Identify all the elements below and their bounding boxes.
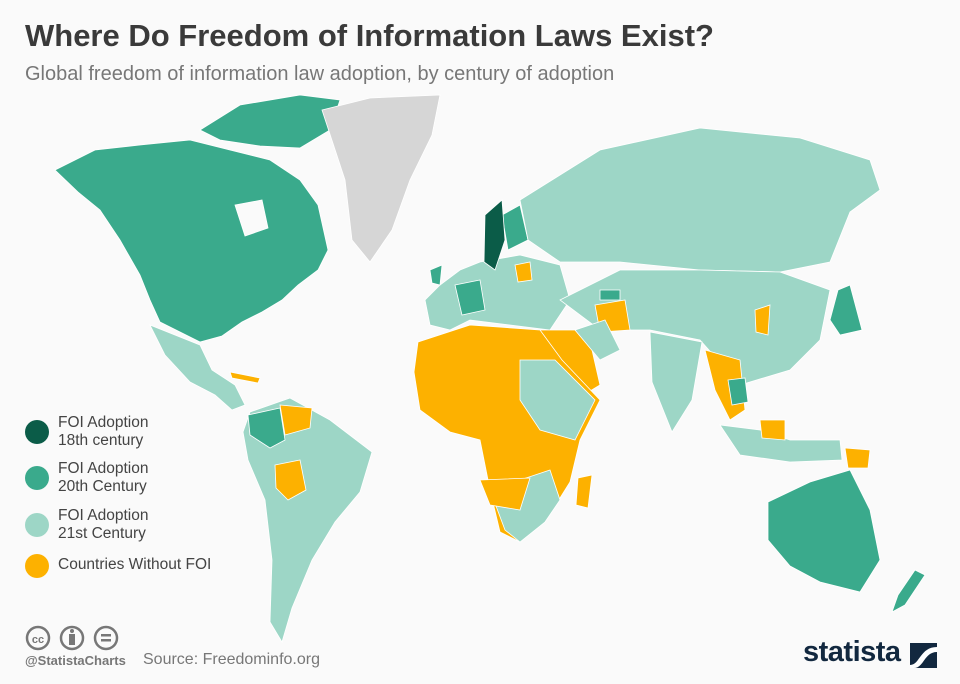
source: Source: Freedominfo.org — [143, 651, 320, 668]
footer credit: @StatistaCharts — [25, 653, 126, 668]
sweden — [484, 200, 505, 270]
legend item: 20th — [25, 460, 148, 495]
legend: FOI Adoption — [58, 414, 148, 431]
new zealand — [892, 570, 925, 612]
legend item: 18th — [25, 414, 148, 449]
legend item: 21st — [25, 507, 148, 542]
russia and north asia — [520, 128, 880, 272]
australia — [768, 470, 880, 592]
legend: 18th century — [58, 432, 143, 449]
legend: 21st Century — [58, 525, 146, 542]
legend — [25, 414, 211, 578]
legend item: without — [25, 554, 211, 578]
north america — [55, 95, 340, 342]
japan — [830, 285, 862, 335]
middle east — [540, 330, 600, 402]
southeast asia — [705, 350, 745, 420]
legend: FOI Adoption — [58, 460, 148, 477]
south america — [243, 398, 372, 642]
legend: 20th Century — [58, 478, 147, 495]
india — [650, 332, 702, 432]
europe — [425, 255, 570, 330]
title: Where Do Freedom of Information Laws Exist? — [25, 18, 714, 53]
legend: FOI Adoption — [58, 507, 148, 524]
greenland — [322, 95, 440, 262]
mexico and central america — [150, 325, 245, 410]
africa — [414, 325, 600, 542]
legend: Countries Without FOI — [58, 556, 211, 573]
asia — [560, 270, 830, 385]
indonesia — [720, 425, 842, 462]
caribbean — [230, 372, 260, 383]
cc icons — [26, 626, 118, 650]
subtitle: Global freedom of information law adoption, by century of adoption — [25, 63, 614, 85]
statista logo: statista — [803, 636, 901, 668]
cc icons: cc — [32, 634, 44, 646]
